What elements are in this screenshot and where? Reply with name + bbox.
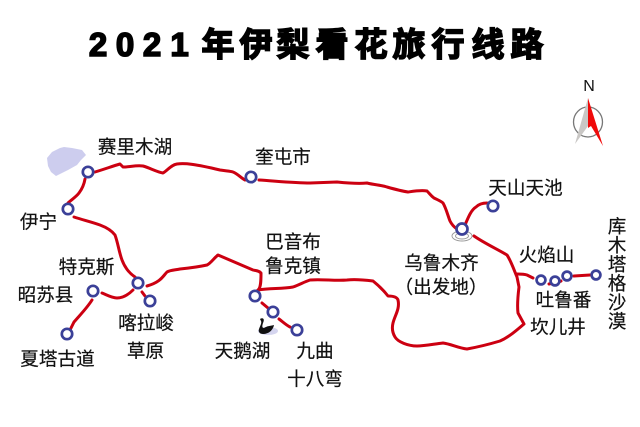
place labels: 喀拉峻 xyxy=(118,312,174,334)
lake: Sayram xyxy=(47,147,86,176)
title: 2 xyxy=(89,26,107,63)
compass: N xyxy=(583,78,595,95)
place labels: 昭苏县 xyxy=(18,284,73,306)
place labels: 夏塔古道 xyxy=(20,348,95,370)
place labels: 赛里木湖 xyxy=(98,136,172,158)
place labels: 格 xyxy=(608,273,627,294)
place labels: 火焰山 xyxy=(519,244,574,266)
title: 梨 xyxy=(276,26,310,63)
place labels: 巴音布 xyxy=(265,232,321,252)
title xyxy=(89,26,544,63)
title: 旅 xyxy=(392,26,426,63)
place labels: 天鹅湖 xyxy=(215,340,270,362)
icon: ripple at Urumqi xyxy=(452,231,472,241)
place labels: 库 xyxy=(608,216,626,237)
title: 行 xyxy=(432,26,464,63)
title: 线 xyxy=(472,26,504,63)
title: 2 xyxy=(143,26,161,63)
place labels: 草原 xyxy=(127,340,164,362)
title: 路 xyxy=(510,26,544,63)
route lines xyxy=(68,164,590,349)
icon: black swan xyxy=(258,318,278,335)
place labels xyxy=(18,136,627,390)
route stops xyxy=(62,167,600,339)
title: 1 xyxy=(170,26,189,63)
place labels: 吐鲁番 xyxy=(536,290,591,310)
title: 伊 xyxy=(240,26,272,63)
place labels: 沙 xyxy=(608,292,626,313)
place labels: 乌鲁木齐 xyxy=(404,252,479,274)
compass xyxy=(574,78,603,146)
place labels: 木 xyxy=(608,235,627,256)
place labels: 鲁克镇 xyxy=(265,256,321,276)
title: 看 xyxy=(316,26,348,63)
title: 0 xyxy=(116,26,134,63)
place labels: 九曲 xyxy=(296,340,334,362)
place labels: 十八弯 xyxy=(287,368,343,390)
place labels: 奎屯市 xyxy=(255,146,311,168)
place labels: 天山天池 xyxy=(488,178,563,198)
place labels: 伊宁 xyxy=(20,212,57,232)
place labels: 漠 xyxy=(608,311,626,332)
place labels: 坎儿井 xyxy=(530,316,586,338)
place labels: 特克斯 xyxy=(59,256,114,278)
place labels: 塔 xyxy=(608,254,627,275)
title: 年 xyxy=(202,26,234,63)
title: 花 xyxy=(354,26,388,63)
place labels: （出发地） xyxy=(395,276,487,298)
